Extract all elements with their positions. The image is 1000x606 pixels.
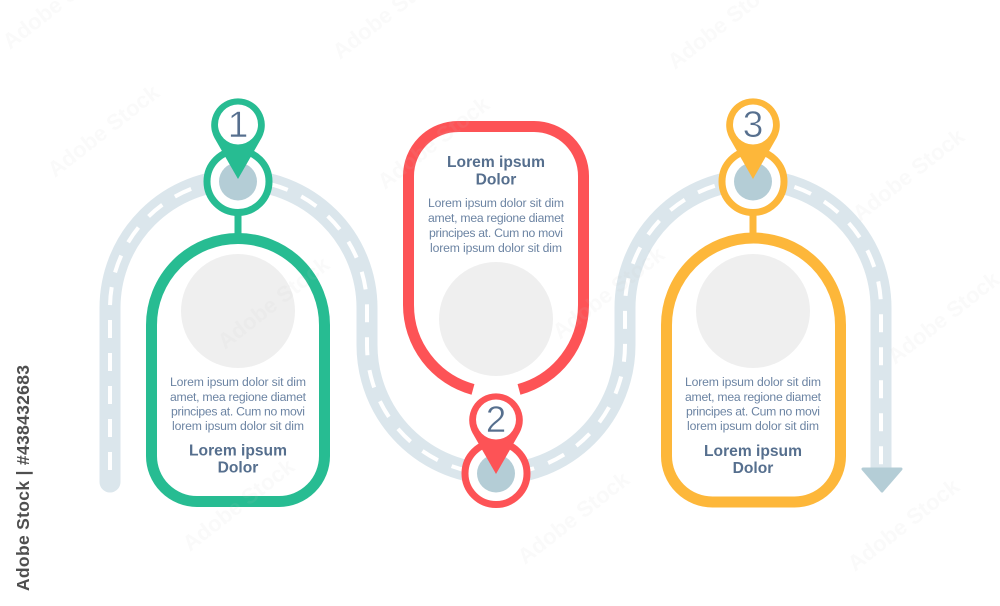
panel 1 body text: Lorem ipsum dolor sit dim [170, 375, 306, 389]
panel 1 heading: Dolor [218, 460, 258, 476]
panel 2 body text: Lorem ipsum dolor sit dim [428, 196, 564, 210]
stop disc 1 [219, 162, 257, 200]
panel 3 body text: principes at. Cum no movi [686, 404, 820, 418]
watermark: Adobe Stock [213, 251, 335, 354]
number 1: 1 [228, 104, 248, 145]
panel 3 body text: lorem ipsum dolor sit dim [687, 419, 819, 433]
panel 1 outline [152, 238, 324, 501]
panel 1 body text: amet, mea regione diamet [170, 390, 307, 404]
panel 3 image placeholder [696, 254, 810, 368]
ring 3 [722, 150, 784, 212]
connector 3 [750, 210, 756, 236]
ring 2 [465, 442, 527, 504]
panel: step 3 [666, 238, 840, 502]
panel 2 outline [408, 126, 584, 389]
panel 2 heading: Lorem ipsum [447, 154, 545, 171]
number 3: 3 [743, 104, 763, 145]
panel 1 body text: principes at. Cum no movi [171, 404, 305, 418]
watermark: Adobe Stock [373, 91, 495, 194]
panel 3 heading: Dolor [733, 460, 773, 477]
stop disc 2 [477, 454, 515, 492]
stop disc 3 [734, 162, 772, 200]
panel 2 body text: amet, mea regione diamet [428, 211, 565, 225]
watermark: Adobe Stock [178, 453, 300, 556]
number 2: 2 [486, 399, 506, 440]
connector 1 [234, 210, 242, 236]
stock id label: Adobe Stock | #438432683 [13, 365, 33, 591]
marker: step 3 [722, 98, 784, 236]
ring 1 [207, 150, 269, 212]
panel 2 heading: Dolor [476, 172, 516, 188]
marker: step 2 [465, 393, 527, 504]
panel 2 body text: principes at. Cum no movi [429, 226, 563, 240]
marker: step 1 [207, 98, 269, 236]
watermark: Adobe Stock [513, 466, 635, 569]
panel: step 1 [152, 238, 324, 501]
panel 1 heading: Lorem ipsum [189, 442, 287, 460]
pin 2 [469, 393, 523, 474]
arrow head [863, 469, 901, 491]
panel 2 body text: lorem ipsum dolor sit dim [430, 241, 562, 255]
watermark: Adobe Stock [43, 79, 165, 182]
panel 2 image placeholder [439, 262, 553, 376]
panel 1 image placeholder [181, 254, 295, 368]
panel 3 outline [666, 238, 840, 502]
panel 3 body text: amet, mea regione diamet [685, 390, 822, 404]
pin 3 [726, 98, 780, 179]
watermark: Adobe Stock [843, 473, 965, 576]
panel 1 body text: lorem ipsum dolor sit dim [172, 419, 304, 433]
winding road [110, 180, 881, 482]
pin 1 [211, 98, 265, 179]
panel 3 body text: Lorem ipsum dolor sit dim [685, 375, 821, 389]
watermark: Adobe Stock [848, 123, 970, 226]
watermark: Adobe Stock [548, 241, 670, 344]
panel 3 heading: Lorem ipsum [704, 443, 802, 460]
panel: step 2 [408, 126, 584, 389]
